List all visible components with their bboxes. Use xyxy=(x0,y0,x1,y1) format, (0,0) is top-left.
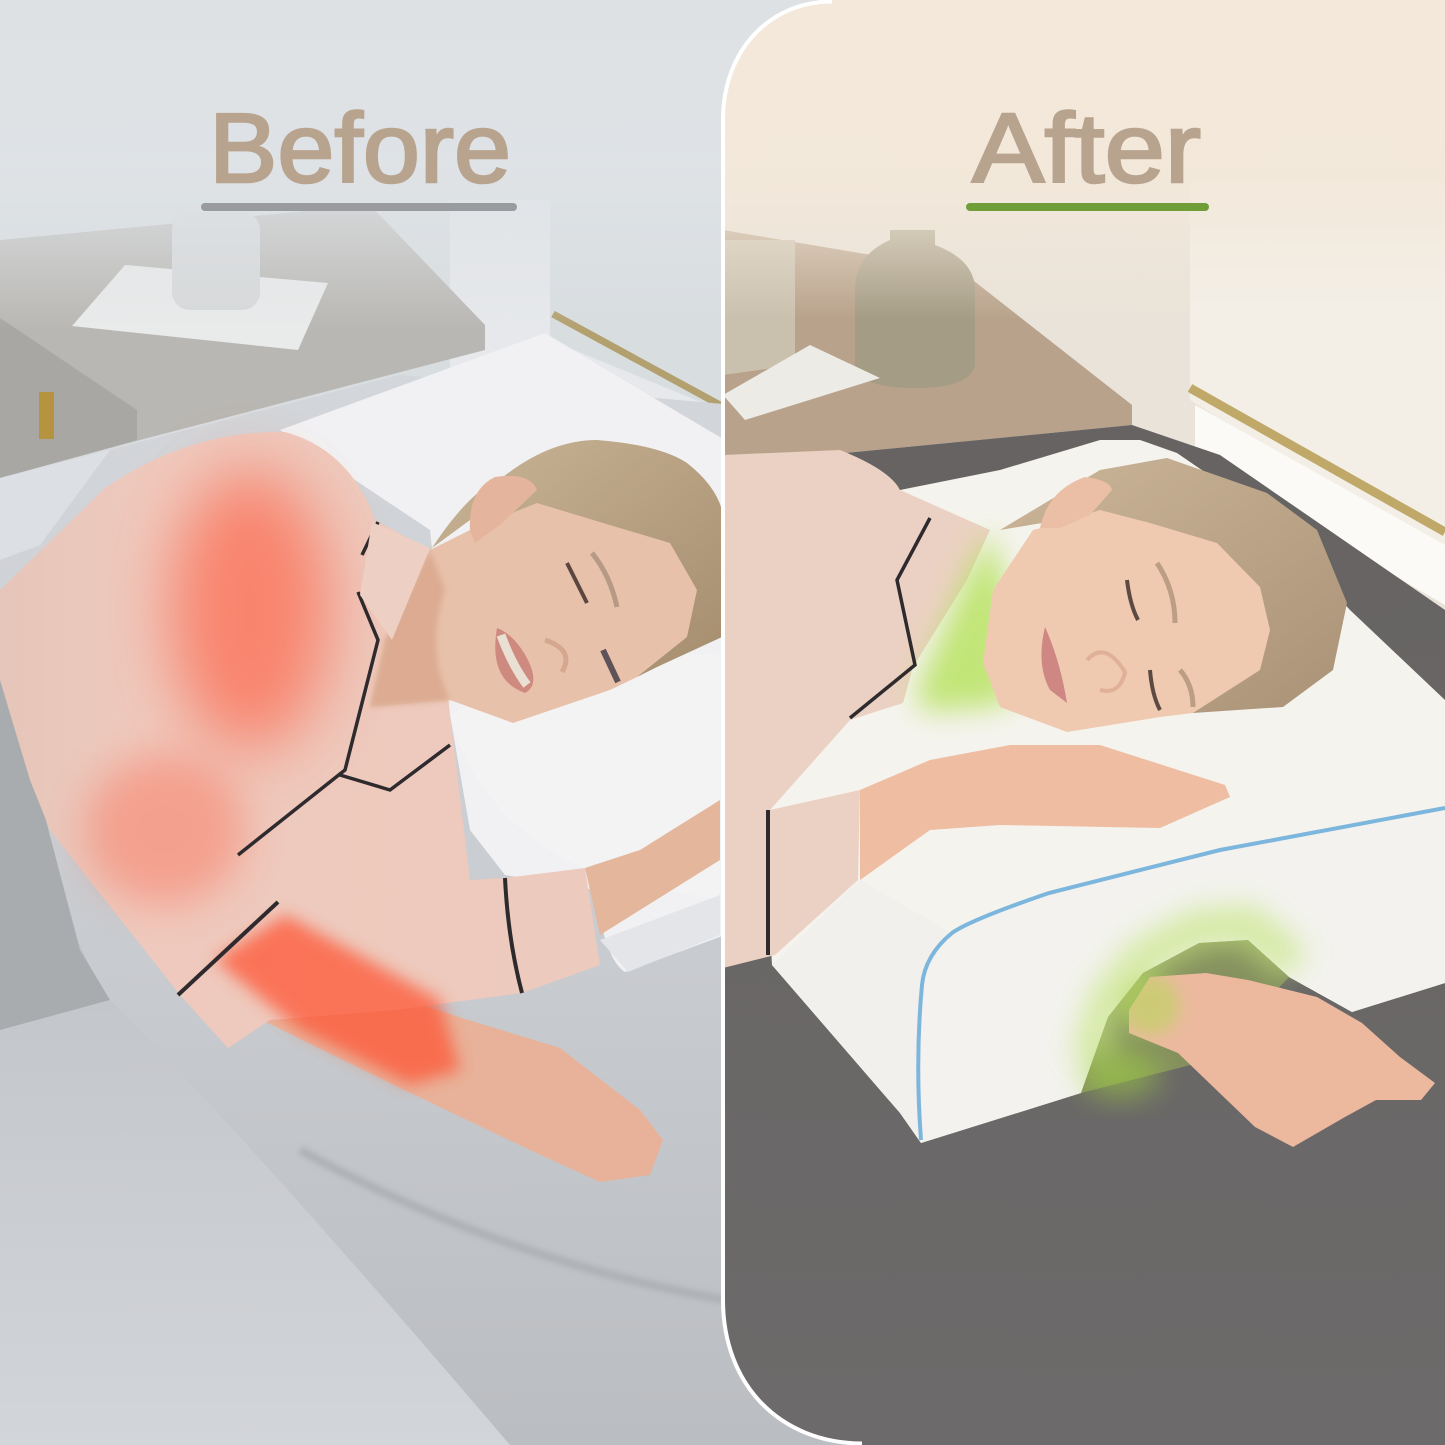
underline: after xyxy=(966,203,1209,211)
near forearm and hand xyxy=(266,1006,663,1182)
nightstand xyxy=(723,230,1132,465)
far cuff piping xyxy=(505,878,522,993)
hair xyxy=(1000,458,1347,713)
clock xyxy=(172,212,260,310)
headboard white band xyxy=(1195,405,1445,605)
pillow xyxy=(760,440,1445,1143)
face and neck xyxy=(370,503,697,723)
red glow: shoulder xyxy=(170,470,330,750)
cuff piping xyxy=(766,810,770,955)
pyjama body xyxy=(723,450,990,968)
wall xyxy=(0,194,721,475)
bed glow xyxy=(1080,1051,1160,1099)
near cuff piping xyxy=(178,902,278,995)
red glow: wrist xyxy=(215,915,460,1085)
underline: before xyxy=(201,203,517,211)
top haze xyxy=(0,211,566,318)
panel: before scene xyxy=(0,0,900,1445)
brows, eyes, nose and lips xyxy=(1041,563,1193,710)
hand on pillow xyxy=(860,745,1230,880)
pillow front shade xyxy=(917,808,1445,1143)
neck shadow xyxy=(370,550,450,707)
brows, eyes, nose and mouth xyxy=(495,553,618,693)
bed frame gold rail xyxy=(553,314,720,405)
collar piping xyxy=(238,522,450,855)
headboard gold rail xyxy=(1190,388,1445,532)
bed frame post xyxy=(450,258,700,402)
collar xyxy=(360,522,430,640)
duvet xyxy=(0,872,510,1445)
sheet fold shadows xyxy=(300,1150,725,1300)
arm through arch xyxy=(1129,973,1435,1147)
face xyxy=(983,510,1270,732)
green glow: neck and collar xyxy=(915,530,1010,712)
pillow left side shade xyxy=(772,880,952,1143)
collar piping xyxy=(850,518,930,718)
far arm xyxy=(585,800,720,935)
ear xyxy=(1040,477,1112,528)
clock xyxy=(723,240,795,375)
divider: curved white border xyxy=(723,2,862,1444)
pillow piping xyxy=(918,808,1445,1140)
bed surface xyxy=(723,425,1445,1445)
heading: After: After xyxy=(972,93,1201,203)
bed sheet xyxy=(0,375,900,1445)
top haze xyxy=(723,0,1445,320)
ear xyxy=(470,476,537,543)
wall xyxy=(900,202,1445,610)
red glow: elbow xyxy=(85,755,245,905)
headboard xyxy=(1190,256,1445,545)
paper on nightstand xyxy=(72,265,328,350)
hair xyxy=(432,440,722,677)
white pillow xyxy=(280,333,725,972)
nightstand xyxy=(0,205,485,478)
pillow arch glow xyxy=(1090,925,1295,1060)
glass vase xyxy=(855,230,975,388)
icon: nightstand handle xyxy=(39,392,54,439)
wrist glow xyxy=(1120,975,1180,1035)
pyjama body xyxy=(0,432,600,1048)
heading: Before: Before xyxy=(209,93,511,203)
arch interior xyxy=(1081,940,1289,1093)
panel: after scene xyxy=(723,0,1445,1445)
paper xyxy=(723,345,880,420)
